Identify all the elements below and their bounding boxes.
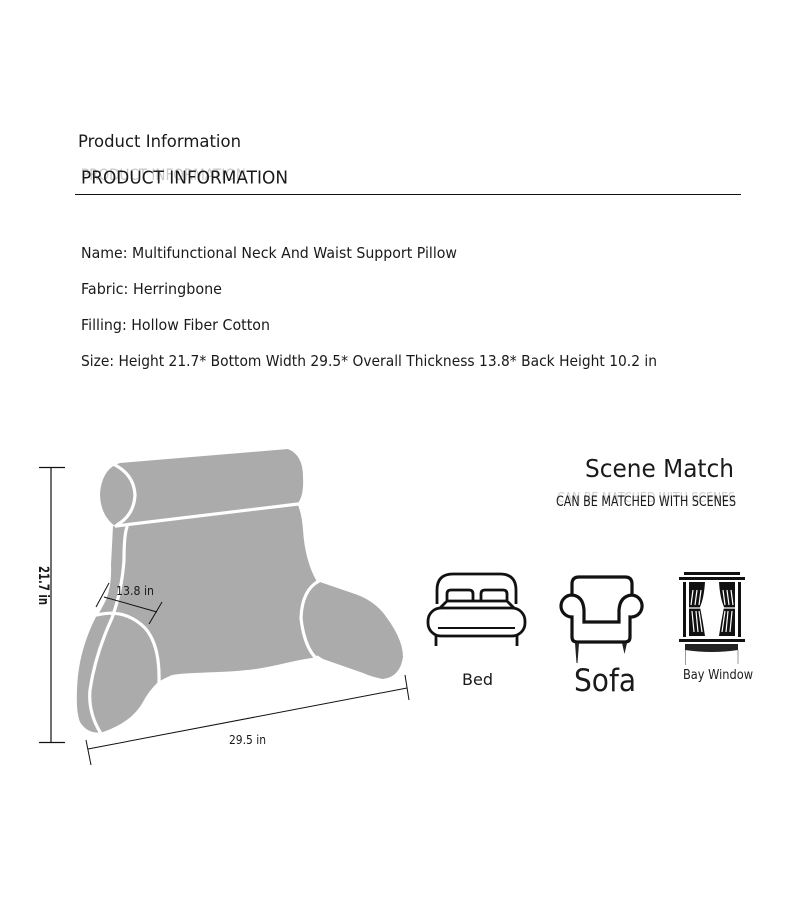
product specification text — [81, 244, 657, 370]
product specification text: Fabric: Herringbone — [81, 280, 222, 298]
icon: bed — [428, 574, 525, 646]
heading: product information — [78, 132, 288, 188]
seams — [90, 465, 319, 732]
dimension: width 29.5 in: 29.5 in — [229, 733, 266, 747]
heading: scene match: Scene Match — [585, 454, 734, 483]
dimension: thickness 13.8 in: 13.8 in — [116, 584, 154, 598]
product specification text: Name: Multifunctional Neck And Waist Support Pillow — [81, 244, 457, 262]
dimension: thickness 13.8 in — [96, 583, 162, 624]
heading: product information: PRODUCT INFORMATION — [81, 165, 246, 184]
bolster cushion — [100, 449, 303, 526]
product specification text: Filling: Hollow Fiber Cotton — [81, 316, 270, 334]
pillow body — [97, 505, 330, 682]
heading: scene match — [556, 454, 736, 510]
left arm — [77, 612, 158, 733]
icon: sofa — [561, 577, 642, 663]
label: bed: Bed — [462, 670, 493, 689]
product specification text: Size: Height 21.7* Bottom Width 29.5* Overall Thickness 13.8* Back Height 10.2 in — [81, 352, 657, 370]
right arm — [300, 582, 403, 679]
dimension: height 21.7 in: 21.7 in — [35, 566, 51, 605]
label: sofa: Sofa — [574, 663, 636, 699]
heading: product information: Product Information — [78, 132, 241, 152]
heading: scene match: CAN BE MATCHED WITH SCENES — [556, 494, 736, 510]
dimension: width 29.5 in — [86, 675, 409, 765]
pillow illustration — [77, 449, 403, 733]
icon: bay window — [679, 572, 745, 665]
label: bay window: Bay Window — [683, 668, 753, 683]
heading: scene match: CAN BE MATCHED WITH SCENES — [557, 491, 735, 506]
heading: product information: PRODUCT INFORMATION — [81, 168, 288, 188]
